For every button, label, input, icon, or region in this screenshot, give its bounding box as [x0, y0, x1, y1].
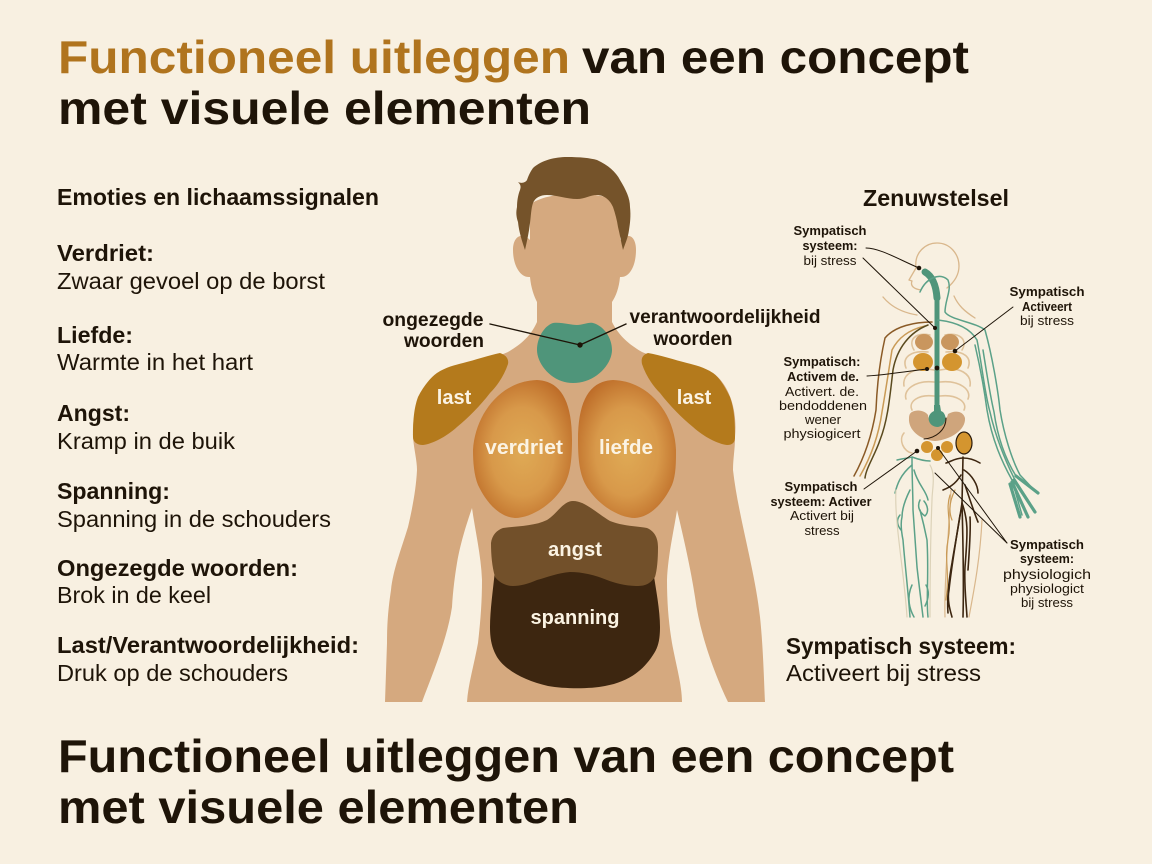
head outline and body lines	[883, 243, 975, 318]
panel: zenuwstelsel	[770, 185, 1091, 686]
label: liefde: liefde	[599, 437, 653, 459]
callout: verantwoordelijkheid woorden: woorden	[653, 329, 732, 350]
label: top left: bij stress	[804, 253, 857, 268]
label: middle left: Sympatisch:	[784, 354, 860, 369]
text: sympatisch systeem	[786, 633, 1016, 686]
label: lower left: stress	[804, 523, 840, 538]
item: verdriet: Verdriet:	[57, 240, 154, 266]
shoulder right: last	[642, 353, 735, 445]
green nerves: left leg	[895, 457, 930, 617]
title	[58, 31, 969, 134]
item: ongezegde woorden: Brok in de keel	[57, 582, 211, 608]
bottom title	[58, 730, 954, 833]
chest right: liefde	[578, 380, 676, 518]
throat: ongezegde woorden	[537, 323, 612, 383]
item: angst: Angst:	[57, 400, 130, 426]
label: middle left: bendoddenen	[779, 398, 867, 413]
label: lower left: systeem: Activer	[770, 494, 872, 509]
callout: ongezegde woorden: woorden	[403, 331, 484, 352]
brown and gold nerves: left arm	[854, 322, 932, 478]
body figure	[382, 157, 820, 702]
item: liefde: Liefde:	[57, 322, 133, 348]
spinal cord	[924, 272, 946, 439]
gold nerves: right leg	[946, 490, 955, 600]
item: ongezegde woorden: Ongezegde woorden:	[57, 555, 298, 581]
callout: verantwoordelijkheid woorden: verantwoordelijkheid	[630, 307, 820, 328]
label: top right: Activeert	[1022, 299, 1073, 314]
leg outlines	[896, 465, 982, 617]
label: lower right: Sympatisch	[1010, 537, 1084, 552]
hair	[516, 157, 630, 250]
stomach	[909, 411, 965, 441]
item: spanning: Spanning in de schouders	[57, 506, 331, 532]
label: lower left: Sympatisch	[784, 479, 858, 494]
item: angst	[57, 400, 236, 454]
item: angst: Kramp in de buik	[57, 428, 236, 454]
panel: emoties en lichaamssignalen	[57, 184, 379, 686]
leader lines	[863, 248, 1013, 543]
label: middle left: wener	[804, 412, 842, 427]
label: top left	[794, 223, 867, 268]
label: verdriet: verdriet	[485, 437, 563, 459]
heading: zenuwstelsel: Zenuwstelsel	[863, 185, 1009, 211]
label: lower left: Activert bij	[790, 508, 854, 523]
belly: spanning	[490, 570, 660, 688]
callout: ongezegde woorden: ongezegde	[382, 310, 484, 331]
heading: emoties: Emoties en lichaamssignalen	[57, 184, 379, 210]
bottom title: Functioneel uitleggen van een concept	[58, 730, 954, 782]
item: verdriet: Zwaar gevoel op de borst	[57, 268, 326, 294]
item: last/verantwoordelijkheid	[57, 632, 359, 686]
title: met visuele elementen	[58, 82, 591, 134]
label: lower right: bij stress	[1021, 595, 1073, 610]
label: top right	[1010, 284, 1085, 328]
item: verdriet	[57, 240, 326, 294]
item: spanning: Spanning:	[57, 478, 170, 504]
label: lower right	[1003, 537, 1091, 610]
label: last right: last	[677, 387, 712, 409]
label: middle left: physiogicert	[784, 426, 861, 441]
shoulder left: last	[413, 353, 508, 445]
item: last/verantwoordelijkheid: Last/Verantwoordelijkheid:	[57, 632, 359, 658]
label: top right: Sympatisch	[1010, 284, 1085, 299]
title: van een concept	[582, 31, 969, 83]
label: last left: last	[437, 387, 472, 409]
chest left: verdriet	[473, 380, 572, 518]
bottom title: met visuele elementen	[58, 781, 579, 833]
label: middle left: Activert. de.	[785, 384, 859, 399]
text: sympatisch systeem: Sympatisch systeem:	[786, 633, 1016, 659]
label: angst: angst	[548, 539, 602, 561]
callout: ongezegde woorden	[382, 310, 484, 352]
dark nerves: right leg	[943, 457, 980, 617]
label: lower left	[770, 479, 872, 538]
callout: verantwoordelijkheid woorden	[630, 307, 820, 350]
label: top right: bij stress	[1020, 313, 1075, 328]
item: liefde	[57, 322, 254, 375]
item: liefde: Warmte in het hart	[57, 349, 254, 375]
organs	[913, 334, 972, 461]
body silhouette	[385, 194, 765, 702]
leader lines to throat	[490, 324, 626, 348]
green nerves: arm and upper body	[920, 276, 1038, 517]
ribs	[902, 334, 970, 453]
label: middle left: Activem de.	[787, 369, 859, 384]
item: spanning	[57, 478, 331, 532]
label: lower right: physiologich	[1003, 566, 1091, 582]
title: Functioneel uitleggen	[58, 31, 570, 83]
nervous system figure	[854, 243, 1038, 617]
item: last/verantwoordelijkheid: Druk op de schouders	[57, 660, 288, 686]
label: middle left	[779, 354, 867, 441]
label: top left: systeem:	[802, 238, 858, 253]
item: ongezegde woorden	[57, 555, 298, 608]
stomach: angst	[491, 501, 658, 586]
label: lower right: systeem:	[1020, 551, 1074, 566]
label: top left: Sympatisch	[794, 223, 867, 238]
label: lower right: physiologict	[1010, 581, 1084, 596]
label: spanning: spanning	[530, 607, 620, 629]
text: sympatisch systeem: Activeert bij stress	[786, 660, 981, 686]
